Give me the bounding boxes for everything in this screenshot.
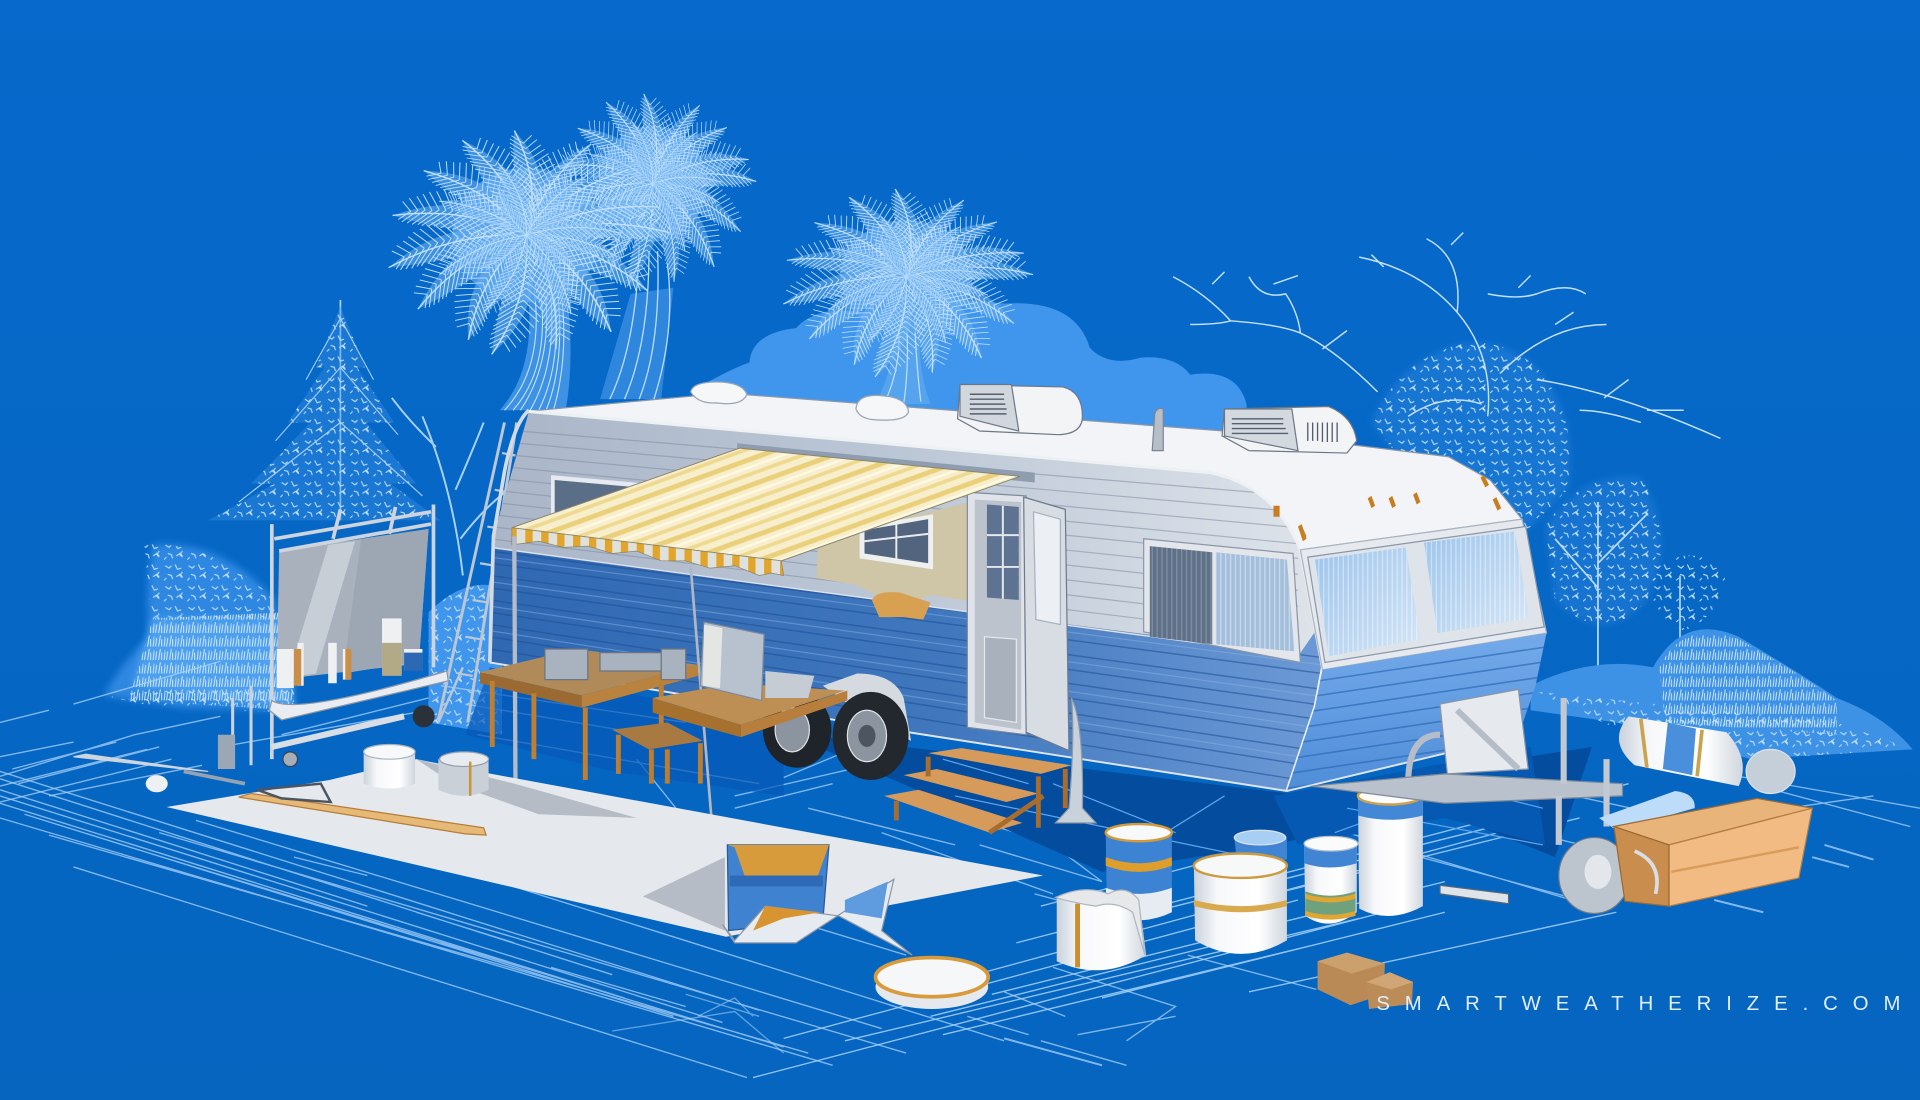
- rear window: [551, 475, 661, 539]
- leafy tree: [1371, 343, 1570, 539]
- roof vent dome: [691, 382, 747, 404]
- door frame and door: [967, 492, 1069, 751]
- roof vent dome 2: [856, 395, 909, 420]
- rolled tube: [1599, 791, 1695, 830]
- roof AC unit 2: [1222, 407, 1357, 453]
- trailer: [484, 382, 1549, 818]
- roof: [527, 393, 1522, 550]
- roof AC unit: [958, 384, 1082, 435]
- metal disc: [1559, 838, 1630, 913]
- background trees right: [1173, 233, 1913, 759]
- bare branches: [1173, 233, 1720, 438]
- round lid: [876, 958, 988, 1009]
- bare sapling: [392, 398, 508, 576]
- bottom edge: [490, 662, 1518, 791]
- striped can: [1304, 836, 1358, 924]
- ground shade under tables: [465, 667, 784, 796]
- trailer hitch and tongue: [1311, 689, 1622, 845]
- roof edge trim: [529, 411, 1322, 791]
- wheels and fender: [763, 673, 911, 780]
- dark paint can: [1234, 830, 1287, 860]
- shadow lines blueprint: [943, 759, 1543, 857]
- trailer ground shadow: [784, 732, 1592, 872]
- front face upper: [1286, 519, 1549, 791]
- awning pole 2: [691, 566, 711, 818]
- tools on ground: [73, 686, 486, 835]
- front cap lights: [1273, 475, 1501, 541]
- scaffold cart with panels: [269, 504, 463, 767]
- background palm center: [777, 182, 1034, 404]
- foliage patch behind ladder: [429, 585, 502, 735]
- conifer tree: [208, 300, 441, 520]
- awning: [512, 448, 1020, 576]
- small tree: [1545, 477, 1727, 716]
- rear corner trim: [490, 410, 529, 662]
- awning pole: [514, 536, 516, 793]
- bush right: [1531, 629, 1913, 759]
- tall white can: [1358, 787, 1423, 916]
- roof vent pipe: [1152, 408, 1163, 451]
- palm tree: rear: [548, 87, 757, 399]
- blueprint floor plan: [0, 661, 1920, 1078]
- blue can: [1106, 824, 1172, 920]
- barrel on side: [1619, 716, 1795, 793]
- window under awning: [860, 514, 933, 569]
- large white can: [1194, 853, 1287, 954]
- tool leaning by door: [1056, 698, 1096, 823]
- peeling patch: [872, 592, 931, 620]
- side upper siding: [484, 404, 1329, 796]
- awning rail: [737, 443, 1035, 482]
- cloud behind trailer: [686, 300, 1249, 465]
- cooler box: [722, 845, 912, 955]
- paint bucket 2 on tarp: [438, 752, 489, 796]
- paint bucket on tarp: [364, 744, 415, 789]
- tarp on ground: [167, 759, 1043, 937]
- awning foot: [498, 791, 533, 806]
- wrapped white can: [1056, 890, 1146, 970]
- side window: [1144, 539, 1300, 662]
- cardboard boxes: [1318, 953, 1413, 1009]
- ladder: [438, 422, 517, 722]
- palm tree: front: [382, 122, 670, 410]
- bush left: [104, 544, 294, 713]
- small tube: [1440, 885, 1509, 904]
- front windows: [1308, 527, 1544, 662]
- wooden tables: [480, 622, 847, 784]
- background trees left: [104, 87, 757, 735]
- website credit: SMARTWEATHERIZE.COM: [1376, 993, 1900, 1015]
- exposed tan panel: [817, 502, 970, 602]
- wooden crate: [1614, 798, 1812, 906]
- steps: [884, 748, 1071, 833]
